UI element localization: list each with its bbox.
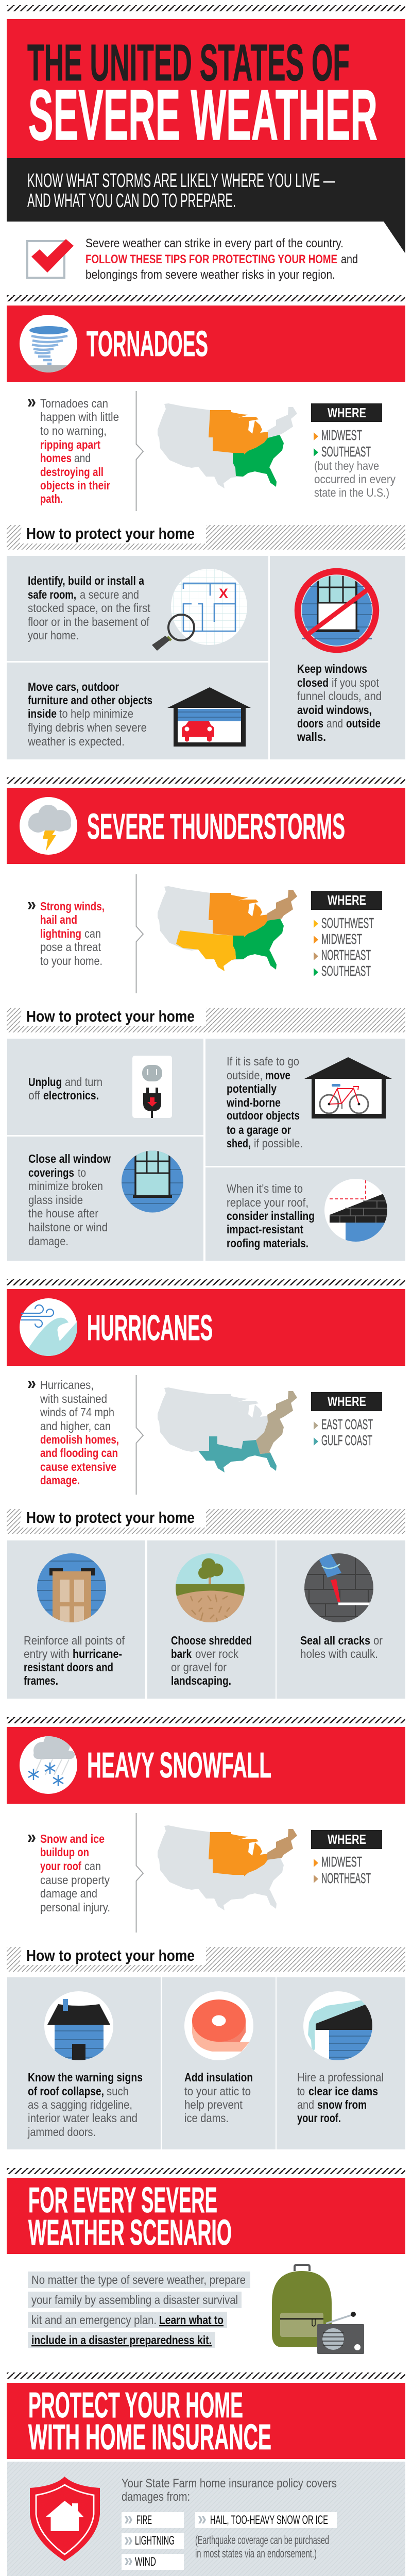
icon: storm cloud (20, 797, 77, 855)
where list: thunderstorms: WHERE (328, 892, 366, 908)
panel: move cars: to help minimize (59, 707, 133, 720)
section header: for every severe weather scenario: WEATHER SCENARIO (28, 2212, 232, 2252)
icon: garage with car (167, 687, 251, 747)
icon: roof shingles (324, 1179, 389, 1243)
panel: clear ice dams: clear ice dams (308, 2084, 378, 2098)
tornado description (28, 397, 119, 505)
where list: snowfall: MIDWEST (321, 1854, 362, 1870)
where list: thunderstorms: NORTHEAST (321, 947, 371, 963)
coverage: lightning: LIGHTNING (135, 2534, 175, 2548)
map: tornado regions (158, 403, 297, 488)
panel: unplug: Unplug (28, 1075, 62, 1089)
highlighted preparedness text: your family by assembling a disaster survival (31, 2293, 238, 2307)
icon: tree and bark (175, 1553, 245, 1624)
snowfall description: can (84, 1859, 101, 1873)
panel: shredded bark: landscaping. (171, 1674, 231, 1687)
panel: move cars (7, 663, 268, 759)
tornado description: destroying all (40, 465, 104, 479)
panel: shredded bark: over rock (195, 1647, 238, 1660)
where list: tornadoes (311, 403, 396, 499)
icon: tornado (20, 315, 77, 376)
icon: insulation roll (184, 1991, 253, 2060)
icon: closed window (122, 1149, 183, 1213)
icon: reinforced door (37, 1553, 107, 1624)
panel: keep windows closed: and (327, 717, 343, 730)
panel: seal cracks: or (373, 1634, 383, 1647)
panel: reinforce doors: entry with (24, 1647, 70, 1660)
where list: tornadoes: WHERE (328, 405, 366, 420)
coverage: hail, snow or ice (195, 2512, 337, 2528)
panel: reinforce doors: frames. (24, 1674, 58, 1687)
panel: insulation: ice dams. (184, 2111, 229, 2125)
section header: hurricanes: HURRICANES (87, 1308, 213, 1348)
hurricane description: with sustained (40, 1392, 107, 1405)
thunderstorm description: hail and (40, 913, 77, 926)
highlighted preparedness text: include in a disaster preparedness kit. (31, 2333, 212, 2347)
thunderstorm description: can (84, 927, 101, 940)
section header: hurricanes (7, 1289, 405, 1366)
panel: safe room: a secure and (80, 588, 139, 601)
coverage: fire: FIRE (136, 2513, 152, 2527)
panel: safe room: Identify, build or install a (28, 574, 144, 587)
panel: home insurance coverage: in most states via an endorsement.) (195, 2547, 317, 2560)
panel: keep windows closed: doors (297, 717, 323, 730)
hurricane description (28, 1378, 119, 1487)
panel: roof collapse: interior water leaks and (28, 2111, 138, 2125)
panel: unplug: and turn (65, 1075, 102, 1089)
panel: move objects to garage: wind-borne (226, 1096, 281, 1109)
section header: for every severe weather scenario: FOR EVERY SEVERE (28, 2180, 217, 2220)
panel: shredded bark: Choose shredded (171, 1634, 252, 1647)
icon: ice dam on roof (303, 1991, 375, 2062)
panel: insulation: help prevent (184, 2098, 243, 2111)
tornado description: and (74, 451, 91, 465)
where list: thunderstorms: SOUTHWEST (321, 915, 374, 931)
panel: shredded bark (147, 1540, 276, 1699)
icon: checkbox (27, 239, 74, 278)
panel: reinforce doors: resistant doors and (24, 1660, 113, 1674)
where list: hurricanes: EAST COAST (321, 1416, 373, 1432)
panel: seal cracks (277, 1540, 405, 1699)
where list: snowfall: NORTHEAST (321, 1870, 371, 1886)
coverage: fire (122, 2512, 184, 2528)
subtitle speech panel: AND WHAT YOU CAN DO TO PREPARE. (27, 190, 236, 212)
panel: close window coverings: coverings (28, 1166, 74, 1179)
tornado description: path. (40, 492, 63, 505)
panel: roof collapse: jammed doors. (27, 2125, 96, 2139)
icon: snow cloud (20, 1731, 77, 1794)
icon: radio (317, 2312, 364, 2354)
panel: clear ice dams: and (297, 2098, 314, 2111)
icon: shed with bicycle (304, 1057, 392, 1118)
panel: move objects to garage: to a garage or (227, 1123, 291, 1137)
tornado description: to no warning, (40, 424, 107, 437)
hurricane description: and flooding can (40, 1446, 118, 1460)
panel: move cars: flying debris when severe (28, 721, 147, 734)
highlighted preparedness text: Learn what to (159, 2313, 224, 2327)
panel: move objects to garage: potentially (227, 1082, 277, 1095)
panel: impact-resistant roofing (205, 1167, 405, 1261)
panel: safe room (7, 556, 268, 661)
panel: clear ice dams: snow from (317, 2098, 367, 2111)
icon: shield with house (30, 2477, 100, 2561)
panel: home insurance coverage: Your State Farm home insurance policy covers (122, 2477, 337, 2490)
thunderstorm description: to your home. (40, 954, 102, 968)
panel: move cars: furniture and other objects (28, 693, 152, 707)
panel: move cars: inside (28, 707, 57, 720)
where list: tornadoes: SOUTHEAST (321, 444, 371, 460)
panel: move objects to garage: outdoor objects (227, 1109, 300, 1122)
heading: how to protect your home: How to protect your home (26, 524, 195, 543)
panel: close window coverings: minimize broken (28, 1179, 103, 1193)
panel: unplug: electronics. (43, 1089, 99, 1102)
where list: tornadoes: occurred in every (314, 472, 396, 486)
panel: roof collapse: such (107, 2084, 129, 2098)
section header: heavy snowfall (7, 1727, 405, 1804)
panel: close window coverings: Close all window (28, 1152, 111, 1165)
highlighted preparedness text (28, 2272, 250, 2348)
panel: move objects to garage: if possible. (254, 1137, 303, 1150)
intro text: and (341, 252, 358, 266)
panel: move objects to garage: shed, (227, 1137, 251, 1150)
panel: safe room: safe room, (28, 588, 76, 601)
snowfall description: cause property (40, 1873, 110, 1887)
intro text: belongings from severe weather risks in your region. (85, 268, 335, 282)
icon: window with prohibition sign (298, 571, 376, 650)
hurricane description: winds of 74 mph (40, 1405, 114, 1419)
heading: how to protect your home: How to protect your home (26, 1007, 195, 1025)
panel: keep windows closed: if you spot (332, 676, 380, 689)
panel: close window coverings: damage. (28, 1234, 68, 1248)
panel: keep windows closed: funnel clouds, and (297, 689, 382, 703)
panel: insulation: to your attic to (184, 2084, 251, 2098)
where list: thunderstorms: SOUTHEAST (321, 963, 371, 979)
panel: clear ice dams: to (297, 2084, 305, 2098)
section header: heavy snowfall: HEAVY SNOWFALL (87, 1745, 271, 1785)
panel: keep windows closed: closed (297, 676, 329, 689)
heading: how to protect your home (7, 1007, 405, 1032)
panel: clear ice dams (277, 1977, 405, 2149)
panel: unplug: off (28, 1089, 41, 1102)
section header: protect your home (7, 2383, 405, 2459)
panel: close window coverings: to (78, 1166, 86, 1179)
thunderstorm description: pose a threat (40, 940, 101, 954)
panel: insulation: Add insulation (184, 2071, 253, 2084)
panel: home insurance coverage (7, 2462, 405, 2576)
panel: clear ice dams: Hire a professional (297, 2071, 384, 2084)
panel: reinforce doors: Reinforce all points of (24, 1634, 125, 1647)
heading: how to protect your home (7, 1509, 405, 1534)
icon: sagging house (44, 1991, 113, 2062)
icon: floor plan under magnifier: X (219, 586, 228, 601)
panel: close window coverings: glass inside (28, 1193, 83, 1207)
coverage: lightning (122, 2533, 184, 2549)
where list: tornadoes: state in the U.S.) (314, 486, 389, 499)
panel: roof collapse (7, 1977, 161, 2149)
panel: move objects to garage: move (265, 1069, 290, 1082)
panel: close window coverings: hailstone or wind (28, 1221, 108, 1234)
where list: tornadoes: (but they have (314, 459, 379, 472)
section header: tornadoes (7, 306, 405, 382)
icon: floor plan under magnifier (152, 569, 247, 650)
hurricane description: cause extensive (40, 1460, 116, 1473)
tornado description: objects in their (40, 479, 110, 492)
title panel (7, 19, 405, 158)
icon: outlet and plug (132, 1056, 172, 1118)
panel: safe room: floor or in the basement of (28, 615, 150, 629)
snowfall description (28, 1832, 110, 1914)
panel: close window coverings: the house after (28, 1207, 98, 1220)
coverage: wind (122, 2554, 184, 2570)
section header: severe thunderstorms (7, 788, 405, 864)
intro text: Severe weather can strike in every part of the country. (85, 236, 344, 250)
heading: how to protect your home: How to protect your home (26, 1946, 195, 1964)
hurricane description: demolish homes, (40, 1433, 119, 1446)
hurricane description: Hurricanes, (40, 1378, 94, 1392)
where list: tornadoes: MIDWEST (321, 427, 362, 443)
thunderstorm description: Strong winds, (40, 900, 105, 913)
panel: safe room: stocked space, on the first (28, 601, 151, 615)
where list: snowfall (311, 1830, 382, 1886)
panel: move objects to garage (205, 1039, 405, 1166)
panel: keep windows closed: Keep windows (297, 662, 367, 675)
map: thunderstorm regions (158, 886, 297, 971)
where list: hurricanes: WHERE (328, 1394, 366, 1409)
panel: impact-resistant roofing: impact-resistant (227, 1223, 303, 1236)
panel: roof collapse: Know the warning signs (28, 2071, 143, 2084)
heading: how to protect your home: How to protect your home (26, 1509, 195, 1527)
panel: move objects to garage: outside, (227, 1069, 263, 1082)
panel: keep windows closed: avoid windows, (297, 703, 372, 717)
panel: roof collapse: of roof collapse, (28, 2084, 104, 2098)
panel: shredded bark: or gravel for (171, 1660, 227, 1674)
where list: hurricanes: GULF COAST (321, 1432, 372, 1448)
snowfall description: damage and (40, 1887, 97, 1900)
panel: seal cracks: Seal all cracks (300, 1634, 370, 1647)
icon: caulk on bricks (304, 1552, 374, 1622)
hurricane description: damage. (40, 1473, 80, 1487)
thunderstorm description: lightning (40, 927, 81, 940)
snowfall description: buildup on (40, 1845, 89, 1859)
snowfall description: Snow and ice (40, 1832, 105, 1845)
icon: wind and wave (20, 1298, 77, 1356)
panel: keep windows closed: outside (346, 717, 381, 730)
panel: seal cracks: holes with caulk. (300, 1647, 378, 1660)
tornado description: ripping apart (40, 438, 100, 451)
where list: thunderstorms: MIDWEST (321, 931, 362, 947)
heading: how to protect your home (7, 1946, 405, 1972)
panel: clear ice dams: your roof. (297, 2111, 341, 2125)
panel: shredded bark: bark (171, 1647, 192, 1660)
thunderstorm description (28, 900, 105, 968)
snowfall description: personal injury. (40, 1901, 110, 1914)
panel: home insurance coverage: (Earthquake coverage can be purchased (195, 2533, 329, 2547)
hurricane description: and higher, can (40, 1419, 111, 1433)
panel: close window coverings (7, 1137, 203, 1261)
panel: keep windows closed (270, 556, 405, 759)
snowfall description: your roof (40, 1859, 81, 1873)
heading: how to protect your home (7, 524, 405, 550)
panel: keep windows closed: walls. (297, 730, 326, 743)
panel: roof collapse: as a sagging ridgeline, (28, 2098, 132, 2111)
panel: impact-resistant roofing: replace your roof, (227, 1196, 308, 1209)
where list: thunderstorms (311, 891, 382, 979)
panel: move cars: weather is expected. (27, 735, 125, 748)
panel: move objects to garage: If it is safe to go (227, 1055, 299, 1068)
panel: reinforce doors: hurricane- (73, 1647, 122, 1660)
highlighted preparedness text: kit and an emergency plan. (31, 2313, 157, 2327)
panel: reinforce doors (7, 1540, 145, 1699)
panel: unplug (7, 1039, 203, 1135)
panel: insulation (162, 1977, 276, 2149)
intro text (85, 236, 358, 282)
panel: safe room: your home. (28, 629, 79, 642)
map: snowfall regions (158, 1825, 297, 1910)
map: hurricane regions (158, 1387, 297, 1472)
where list: snowfall: WHERE (328, 1832, 366, 1847)
coverage: wind: WIND (135, 2555, 156, 2569)
tornado description: homes (40, 451, 72, 465)
panel: impact-resistant roofing: consider installing (227, 1209, 315, 1223)
intro text: FOLLOW THESE TIPS FOR PROTECTING YOUR HOME (85, 252, 337, 266)
icon: backpack (272, 2265, 332, 2347)
coverage: hail, snow or ice: HAIL, TOO-HEAVY SNOW OR ICE (210, 2513, 328, 2527)
tornado description: happen with little (40, 410, 119, 423)
panel: home insurance coverage: damages from: (122, 2490, 190, 2504)
tornado description: Tornadoes can (40, 397, 108, 410)
panel: impact-resistant roofing: When it’s time to (227, 1182, 303, 1195)
panel: impact-resistant roofing: roofing materials. (227, 1236, 308, 1250)
highlighted preparedness text: No matter the type of severe weather, prepare (31, 2273, 246, 2286)
where list: hurricanes (311, 1392, 382, 1448)
section header: for every severe weather scenario (7, 2178, 405, 2254)
section header: tornadoes: TORNADOES (87, 324, 208, 364)
subtitle speech panel (7, 158, 405, 253)
panel: move cars: Move cars, outdoor (28, 680, 119, 693)
